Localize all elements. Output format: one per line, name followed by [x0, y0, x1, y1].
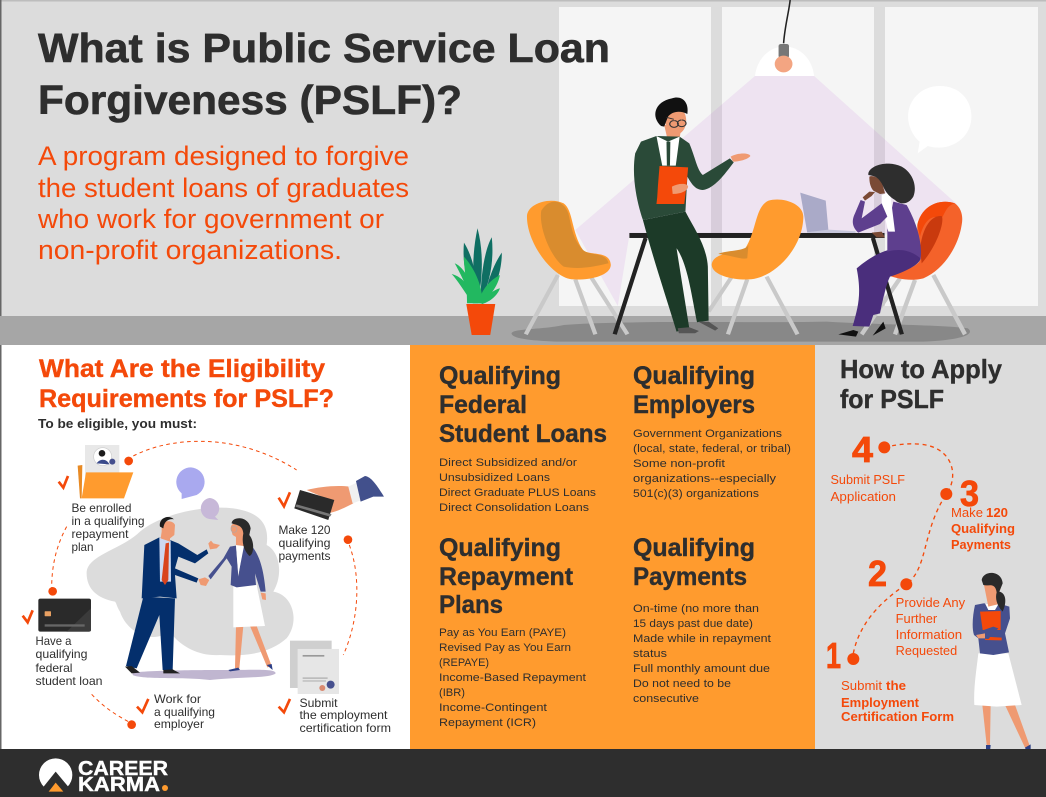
payments list: Made while in repayment: [633, 633, 771, 645]
check marks: [23, 476, 290, 712]
ground shadow: [133, 670, 276, 680]
step labels: Submit: [841, 679, 883, 693]
federal student loans heading: Student Loans: [439, 420, 607, 448]
repayment plans list: Income-Based Repayment: [439, 672, 586, 684]
step labels: Information: [896, 628, 962, 642]
requirement labels: qualifying: [278, 536, 330, 550]
payments list: 15 days past due date): [633, 618, 753, 630]
employers list: Government Organizations: [633, 428, 783, 440]
repayment plans list: Repayment (ICR): [439, 717, 536, 729]
connector dots: [48, 457, 352, 729]
federal student loans heading: Qualifying: [439, 362, 561, 390]
requirement labels: employer: [154, 717, 204, 731]
payments heading: Qualifying: [633, 534, 755, 562]
seated woman: [838, 164, 921, 337]
employers list: [633, 428, 791, 500]
requirement labels: Be enrolled: [72, 501, 132, 515]
repayment plans list: (IBR): [439, 687, 465, 699]
repayment plans heading: Plans: [439, 591, 503, 619]
step labels: Submit PSLF: [830, 473, 905, 487]
requirement labels: payments: [278, 549, 330, 563]
step numbers: 4: [852, 429, 873, 470]
icon: hand with card: [294, 476, 384, 520]
requirement labels: Have a: [36, 634, 72, 648]
step numbers: 1: [826, 635, 841, 676]
requirement labels: federal: [36, 661, 72, 675]
subtitle: the student loans of graduates: [38, 173, 409, 203]
repayment plans list: Revised Pay as You Earn: [439, 642, 571, 654]
repayment plans heading: [439, 534, 574, 619]
eligibility heading: [39, 355, 334, 413]
chair left: [526, 201, 627, 334]
federal student loans list: Unsubsidized Loans: [439, 472, 551, 484]
panel: qualifying criteria: [410, 345, 815, 749]
employers list: 501(c)(3) organizations: [633, 488, 760, 500]
step labels: Employment: [841, 696, 920, 710]
cloud: [87, 508, 294, 655]
step labels: 120: [986, 506, 1008, 520]
federal student loans heading: [439, 362, 607, 448]
eligibility heading: What Are the Eligibility: [39, 355, 325, 383]
lamp: [755, 0, 814, 76]
step labels: the: [886, 679, 906, 693]
step labels: Application: [830, 490, 896, 504]
repayment plans list: Income-Contingent: [439, 702, 547, 714]
repayment plans heading: Repayment: [439, 563, 574, 591]
eligibility icons and connectors: [23, 441, 384, 729]
handshake illustration: [125, 517, 276, 680]
federal student loans list: [439, 457, 597, 514]
chair centre and laptop: [634, 97, 855, 334]
payments heading: Payments: [633, 563, 747, 591]
federal student loans list: Direct Consolidation Loans: [439, 502, 590, 514]
requirement labels: a qualifying: [154, 705, 215, 719]
plant: [452, 228, 502, 335]
footer: [0, 749, 1046, 797]
step labels: Requested: [896, 644, 957, 658]
requirement labels: student loan: [36, 674, 102, 688]
dashed connector arrows: [52, 441, 357, 722]
office illustration: [452, 0, 971, 342]
requirement labels: the employment: [300, 708, 388, 722]
apply heading: for PSLF: [840, 384, 944, 414]
seated woman and her chair: [862, 202, 965, 334]
requirement labels: Make 120: [278, 523, 331, 537]
chair centre: [709, 199, 803, 334]
payments list: consecutive: [633, 693, 699, 705]
floor shadow: [512, 322, 970, 342]
logo wordmark: [78, 758, 169, 796]
requirement labels: Submit: [300, 696, 338, 710]
payments list: Do not need to be: [633, 678, 731, 690]
logo dot: [162, 785, 168, 791]
apply heading: How to Apply: [840, 354, 1003, 384]
step labels: Qualifying: [951, 522, 1015, 536]
speech bubbles: [176, 467, 219, 520]
step numbers: 2: [868, 553, 887, 594]
eligibility intro: To be eligible, you must:: [38, 417, 197, 431]
requirement labels: qualifying: [36, 647, 88, 661]
payments heading: [633, 534, 755, 591]
repayment plans list: (REPAYE): [439, 657, 489, 669]
payments list: On-time (no more than: [633, 603, 759, 615]
employers heading: Qualifying: [633, 362, 755, 390]
payments list: status: [633, 648, 668, 660]
logo wordmark: KARMA: [78, 774, 160, 796]
laptop: [800, 193, 855, 233]
panel: how to apply: [815, 345, 1046, 752]
subtitle: A program designed to forgive: [38, 141, 409, 171]
requirement labels: Work for: [154, 692, 201, 706]
main title: What is Public Service Loan: [38, 25, 610, 71]
step numbers: 3: [960, 473, 979, 514]
employers heading: [633, 362, 755, 419]
eligibility heading: Requirements for PSLF?: [39, 385, 334, 413]
federal student loans list: Direct Subsidized and/or: [439, 457, 577, 469]
federal student loans list: Direct Graduate PLUS Loans: [439, 487, 597, 499]
light beam: [575, 76, 956, 306]
repayment plans list: [439, 627, 586, 729]
subtitle: who work for government or: [37, 204, 384, 234]
panel: eligibility: [2, 345, 410, 749]
main title: Forgiveness (PSLF)?: [38, 77, 462, 123]
businessman: [125, 517, 220, 673]
step labels: Provide Any: [896, 596, 966, 610]
requirement labels: plan: [72, 540, 94, 554]
subtitle: [37, 141, 409, 265]
requirement labels: repayment: [72, 527, 129, 541]
step labels: Make: [951, 506, 983, 520]
federal student loans heading: Federal: [439, 391, 527, 419]
payments list: Full monthly amount due: [633, 663, 770, 675]
requirement labels: certification form: [300, 721, 391, 735]
repayment plans heading: Qualifying: [439, 534, 561, 562]
step numbers: [826, 429, 979, 676]
employers list: (local, state, federal, or tribal): [633, 443, 791, 455]
payments list: [633, 603, 771, 705]
icon: credit card: [38, 599, 91, 632]
employers list: organizations--especially: [633, 473, 777, 485]
logo wordmark: CAREER: [78, 758, 169, 780]
requirement labels: in a qualifying: [72, 514, 144, 528]
table: [615, 233, 902, 334]
chair right: [862, 202, 965, 334]
businesswoman: [198, 518, 273, 671]
step labels: Payments: [951, 538, 1011, 552]
step labels: Certification Form: [841, 710, 954, 724]
apply heading: [840, 354, 1003, 414]
standing man: [634, 97, 750, 333]
employers heading: Employers: [633, 391, 755, 419]
step labels: Further: [896, 612, 937, 626]
icon: folder: [78, 445, 133, 498]
standing woman with book: [973, 573, 1031, 752]
icon: certificate: [290, 641, 339, 694]
repayment plans list: Pay as You Earn (PAYE): [439, 627, 566, 639]
main title: [38, 25, 610, 123]
logo mark: [39, 758, 73, 792]
step path: [847, 441, 953, 665]
speech bubble: [908, 86, 971, 153]
requirement labels: [36, 501, 391, 735]
step labels: [830, 473, 1015, 724]
subtitle: non-profit organizations.: [38, 235, 342, 265]
employers list: Some non-profit: [633, 458, 725, 470]
